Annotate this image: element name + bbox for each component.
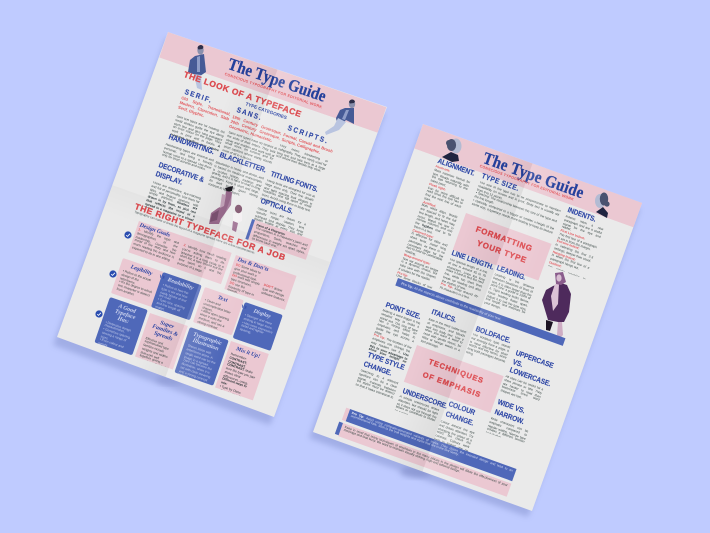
panel: a good typeface has: • Generous spacing, serving a range of sizes.	[100, 327, 131, 342]
section: opticals: OPTICALS.	[259, 196, 294, 216]
panel: text: • Clean and uncomplicated letter shapes.	[202, 298, 231, 315]
indents text: First Line Indent:	[560, 228, 586, 241]
callout: pairs of a character: The variation in a character's parts and proportions. Serifs, swashes and differences in weight set apart styles, so know each one.	[251, 226, 308, 254]
panel: legibility	[111, 258, 164, 307]
label: vs: VS	[159, 273, 166, 280]
alignment text: Centered type:	[412, 228, 434, 239]
section: sans: SANS.	[235, 105, 264, 122]
panel: design goals: 2. Identify how much reading you're asking them to do. Whether it is a long essay or a short list, a type should suit the time spent on it and the purpose of a page.	[177, 243, 227, 276]
indents text: The first line of a paragraph is set in from the margin.	[557, 232, 598, 251]
section: type style change: CHANGE.	[362, 359, 393, 378]
panel: dos and don'ts: DO work with simple type structures.	[230, 273, 260, 288]
panel: design goals: 1. Identify the topic and demographics of the readership. Consider the mood of the story and how much reading the audience is expected to do in one sitting.	[132, 227, 180, 262]
section: serif: SERIF.	[183, 87, 214, 105]
panel: legibility: Legibility	[130, 264, 153, 277]
section: colour change	[444, 399, 476, 428]
panel: techniques of emphasis	[404, 345, 504, 413]
panel: readability: Readability	[167, 277, 194, 292]
check icon 2	[109, 270, 117, 278]
section: uppercase vs lowercase	[508, 348, 555, 388]
panel: text: • Allow open spacing when it suits the medium, and use a strong contrast.	[197, 309, 229, 330]
section: uppercase vs lowercase: UPPERCASE	[514, 348, 555, 370]
figure: woman portrait right	[595, 192, 610, 218]
leading text: Leading is the distance between baselines of lines of text. It is often larger than the point size: a guide is 120% of it. Tight leading looks dense, loose leading floats apart. Adjust it to suit the type size, line length and measure for your design.	[484, 273, 535, 315]
heading: techniques of emphasis	[421, 357, 485, 399]
section: handwriting: HANDWRITING.	[167, 132, 215, 156]
subtitle: CONSCIOUS TYPOGRAPHY FOR EDITORIAL WORK	[224, 72, 323, 109]
type size text: • Spacing: The relationship between the size of the type and the line length.	[474, 191, 557, 224]
panel: mix it up: Mix it Up!	[235, 346, 261, 360]
section: scripts: SCRIPTS.	[286, 123, 330, 146]
section: line length: LINE LENGTH.	[450, 248, 495, 272]
type size text	[471, 181, 561, 234]
heading: techniques of emphasis: OF EMPHASIS	[421, 370, 482, 399]
point size text	[368, 309, 421, 364]
indents text: Is when the first line of a paragraph hangs out.	[550, 253, 590, 270]
panel: typographic illustration	[174, 327, 229, 386]
type size text: The size of the type has to be proportionate to maintain readability on screen and in print. Body text is usually set from 9 to 12 points.	[476, 181, 561, 216]
poster: left sheet, the look of a typeface	[57, 32, 387, 417]
panel: design goals: Design Goals	[139, 223, 171, 239]
panel: a good typeface has: • Distinctive design characteristics.	[104, 320, 132, 334]
section: uppercase vs lowercase: LOWERCASE.	[508, 365, 552, 388]
type categories label: TYPE CATEGORIES	[245, 101, 288, 120]
alignment text: Flush right:	[429, 182, 446, 191]
section: boldface: BOLDFACE.	[474, 324, 512, 345]
heading: formatting your type: FORMATTING	[475, 225, 534, 253]
panel: dos and don'ts: DON'T distort type with design software features.	[261, 283, 286, 302]
panel: formatting your type	[453, 213, 552, 281]
section: titling fonts: TITLING FONTS.	[269, 169, 319, 194]
alignment text: Can be more difficult to read since the eye has to find the next line of each start.	[424, 185, 464, 209]
section: decorative and display: DECORATIVE &	[157, 160, 205, 184]
label: vs: VS	[241, 303, 248, 310]
pro tip band: Pro Tip: Avoid using computer-generated variants of styles. They distort the intended design and lead to an unprofessional look. Stick to the true weights and styles that are in the font family.	[350, 410, 514, 472]
alignment text: Is effective for titles and short texts. Avoid long passages, as there is no consistent edge for the eye to hold for comfortable reading.	[404, 231, 448, 262]
title: The Type Guide	[480, 148, 587, 202]
section: point size: POINT SIZE.	[384, 300, 422, 321]
panel: readability: • Type size, spacing and line length all matter.	[155, 297, 185, 313]
heading: techniques of emphasis: TECHNIQUES	[427, 357, 485, 385]
section: wide vs narrow: WIDE VS.	[496, 397, 526, 415]
pro tip strip	[395, 278, 565, 346]
panel: dos and don'ts: Dos & Don'ts	[237, 257, 269, 273]
panel: mix it up: • Type by Class	[219, 384, 241, 395]
panel: a good typeface has	[94, 297, 148, 355]
check icon 1	[124, 231, 132, 239]
indents text	[548, 215, 604, 280]
heading: the right typeface for a job: THE RIGHT TYPEFACE FOR A JOB	[133, 201, 287, 263]
line length text: Pro Tip: Keep around 45-75 characters in a line.	[439, 282, 479, 300]
panel: design goals	[128, 221, 232, 284]
check icon 3	[95, 310, 103, 318]
header band	[414, 124, 642, 227]
section: uppercase vs lowercase: VS.	[511, 357, 524, 369]
intro line: Typography can make or break the layout of a magazine spread. Here are a few considerations:	[134, 210, 255, 255]
heading: formatting your type: YOUR TYPE	[476, 239, 528, 265]
alignment text: Pro tip:	[397, 270, 409, 277]
section: wide vs narrow: NARROW.	[493, 407, 525, 426]
panel: super families and spreads: Super Families & Spreads	[151, 320, 179, 343]
alignment text: Wrap-around type:	[403, 252, 431, 266]
panel: display: • Has more expressive detail and tighter spacing.	[239, 320, 273, 335]
panel: dos and don'ts: DO use the hierarchy of type in layouts.	[227, 280, 255, 296]
panel: dos and don'ts: DO Some ideas to give your work a professional look.	[233, 263, 261, 282]
panel: display: Display	[252, 308, 271, 320]
section: blackletter: BLACKLETTER.	[218, 150, 268, 175]
panel: text	[193, 287, 244, 335]
section: wide vs narrow	[493, 397, 526, 426]
figure: seated man	[188, 45, 206, 90]
indents text: Outdent:	[548, 260, 562, 268]
subtitle: CONSCIOUS TYPOGRAPHY FOR EDITORIAL WORK	[479, 164, 574, 202]
panel: dos and don'ts	[224, 255, 297, 310]
alignment text: Justified:	[422, 199, 437, 208]
panel: typographic illustration: Shows ideas with letterforms alone. A single word can be the image in a spread. Type can become the illustration, when it is set with clear meaning and a strong concept behind.	[177, 344, 216, 382]
panel: a good typeface has: • Even colour and weight.	[98, 337, 124, 349]
panel: mix it up: • Type by Weight	[218, 387, 242, 399]
panel: mix it up: Remember: CONTRAST, CONTRAST, CONTRAST. Make sure the type you pair shows clear differences, using:	[223, 352, 256, 385]
alignment text	[396, 165, 471, 289]
closing note band: Keep in mind that many techniques of emphasis in too many places in the design will dilute the effectiveness of your message and look busy. We want to maintain visually striking, high-end editorial design.	[343, 424, 508, 487]
panel: display: • Stronger and more striking in large sizes.	[243, 313, 273, 330]
heading: the look of a typeface: THE LOOK OF A TYPEFACE	[182, 69, 303, 119]
panel: mix it up: Different ways to mix:	[220, 377, 247, 389]
section: alignment: ALIGNMENT.	[436, 156, 476, 178]
panel: legibility: • It's the degree to which one character is distinct from another.	[116, 280, 153, 298]
figure: crouching man	[325, 100, 356, 135]
figure: standing woman	[542, 272, 571, 337]
poster: right sheet, formatting and emphasis	[313, 124, 642, 511]
section: type style change: TYPE STYLE	[366, 350, 406, 372]
alignment text: Both sides align. Words are spaced to fit the full line length, and holes may occur. Watch the text in narrow columns and use the hyphen tool to fix them in a line.	[413, 203, 458, 237]
section: indents: INDENTS.	[566, 205, 597, 224]
indents text: Hanging Indent:	[552, 249, 576, 261]
callout: pairs of a character	[248, 220, 313, 260]
alignment text: Text set around an image is a dynamic choice, but take care with the shapes it creates for the reader.	[398, 256, 439, 282]
panel: display	[233, 302, 283, 351]
panel: typographic illustration: Typographic Illustration	[192, 332, 223, 352]
panel: a good typeface has: A Good Typeface Has:	[114, 303, 136, 326]
section: underscore: UNDERSCORE.	[401, 386, 449, 411]
indents text: Is indenting the first 2-3 settings, deeper than usual.	[554, 242, 594, 263]
figure: woman portrait left	[442, 138, 462, 162]
section: colour change: CHANGE.	[444, 409, 475, 428]
section: italics: ITALICS.	[430, 307, 458, 324]
section: type size: TYPE SIZE.	[480, 171, 521, 193]
alignment text: Most common format for text. Reads naturally with the eye returning to the same point.	[430, 168, 471, 191]
section: colour change: COLOUR	[447, 399, 476, 417]
type size text: • Optically, compared to a bigger or smaller x-height of the same size, a typeface needs more leading to keep its texture even and inviting to the eye on every spread.	[471, 198, 555, 234]
header band	[159, 32, 386, 133]
panel: legibility: • Refers to the actual design of the letterforms.	[120, 269, 152, 285]
title: The Type Guide	[226, 54, 329, 106]
indents text: Extreme Indent:	[556, 239, 580, 251]
callout: pairs of a character: Pairs of a Character	[256, 223, 286, 236]
section: leading: LEADING.	[495, 263, 527, 282]
panel: readability	[151, 272, 202, 320]
panel: mix it up	[215, 341, 269, 400]
panel: readability: • Refers to how the type is set and how easily blocks of text are read.	[158, 283, 189, 303]
panel: text: Text	[217, 295, 228, 304]
panel: super families and spreads	[135, 313, 188, 370]
section: decorative and display: DISPLAY.	[154, 169, 184, 187]
pro tip strip: Pro Tip: All the aspects above contribute to the readability of your text.	[401, 282, 502, 321]
figure: two dancers	[209, 186, 242, 232]
